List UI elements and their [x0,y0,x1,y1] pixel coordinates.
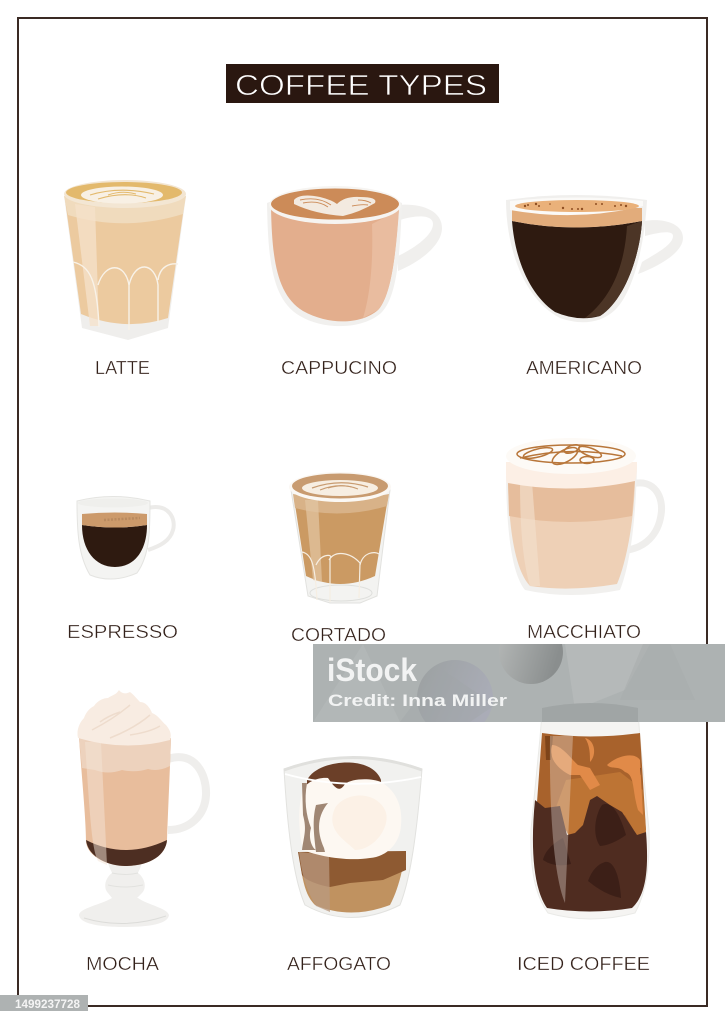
coffee upper layer [535,733,646,830]
latte drink [65,200,185,324]
title: COFFEE TYPES [235,70,487,102]
latte foam band [64,196,186,223]
label: mocha: MOCHA [86,954,159,974]
mocha milk layer [79,738,171,772]
espresso crema [82,512,147,528]
caramel mid layer [555,772,646,838]
watermark logo text: iStock [327,652,417,688]
whipped cream [77,690,171,746]
affogato dark coffee [298,851,406,887]
macchiato [506,438,662,595]
chocolate syrup drips [302,783,328,852]
macchiato lower layer [508,480,635,589]
macchiato middle layer [508,479,635,522]
dark coffee [533,796,647,912]
espresso handle [148,507,174,550]
mocha handle [168,757,206,830]
mocha [77,690,206,927]
iced coffee glass [531,706,649,919]
americano coffee [512,221,642,318]
ice cream scoop [299,778,401,859]
watermark credit text: Credit: Inna Miller [328,691,507,710]
ice cubes [543,736,641,898]
americano crema band [512,208,642,228]
chocolate top [307,763,381,800]
label: macchiato: MACCHIATO [527,622,641,642]
latte art [81,186,163,204]
label: espresso: ESPRESSO [67,622,178,642]
americano handle [638,220,683,274]
label: iced coffee: ICED COFFEE [517,954,650,974]
macchiato handle [628,483,662,550]
label: cortado: CORTADO [291,625,386,645]
macchiato glass [506,465,637,595]
mocha coffee base [86,840,167,866]
cortado surface [289,472,391,502]
cappuccino handle [398,205,442,271]
cappuccino surface [269,186,401,224]
heart art [294,196,375,216]
mocha stem [105,862,145,898]
americano [506,195,683,322]
title [226,64,499,103]
cappuccino drink [271,207,399,321]
label: cappuccino: CAPPUCINO [281,358,397,378]
mocha foot [79,898,169,927]
mocha drink [79,738,171,866]
cortado glass [291,490,390,603]
label: affogato: AFFOGATO [287,954,391,974]
americano cup [506,195,647,322]
caramel swirls [551,738,643,815]
latte glass [64,196,186,340]
cortado art [302,480,378,496]
cappuccino [267,186,442,326]
espresso coffee [82,525,147,567]
glass highlight [550,736,573,903]
americano surface [510,198,643,215]
cortado coffee [294,498,388,584]
iced coffee [531,706,649,919]
affogato glass [284,757,422,918]
latte [64,180,186,340]
cortado [289,472,391,603]
image id badge [0,995,88,1011]
label: latte: LATTE [95,358,150,378]
image id badge: 1499237728 [15,999,81,1011]
affogato rim [284,758,422,770]
cappuccino cup [267,189,402,326]
macchiato foam [506,462,637,489]
affogato light coffee [299,852,405,912]
macchiato caramel art [517,443,625,468]
espresso [77,496,174,579]
latte rim [64,180,186,208]
espresso glass [77,496,150,579]
iStock watermark banner [313,644,725,722]
label: americano: AMERICANO [526,358,642,378]
affogato [284,757,422,918]
